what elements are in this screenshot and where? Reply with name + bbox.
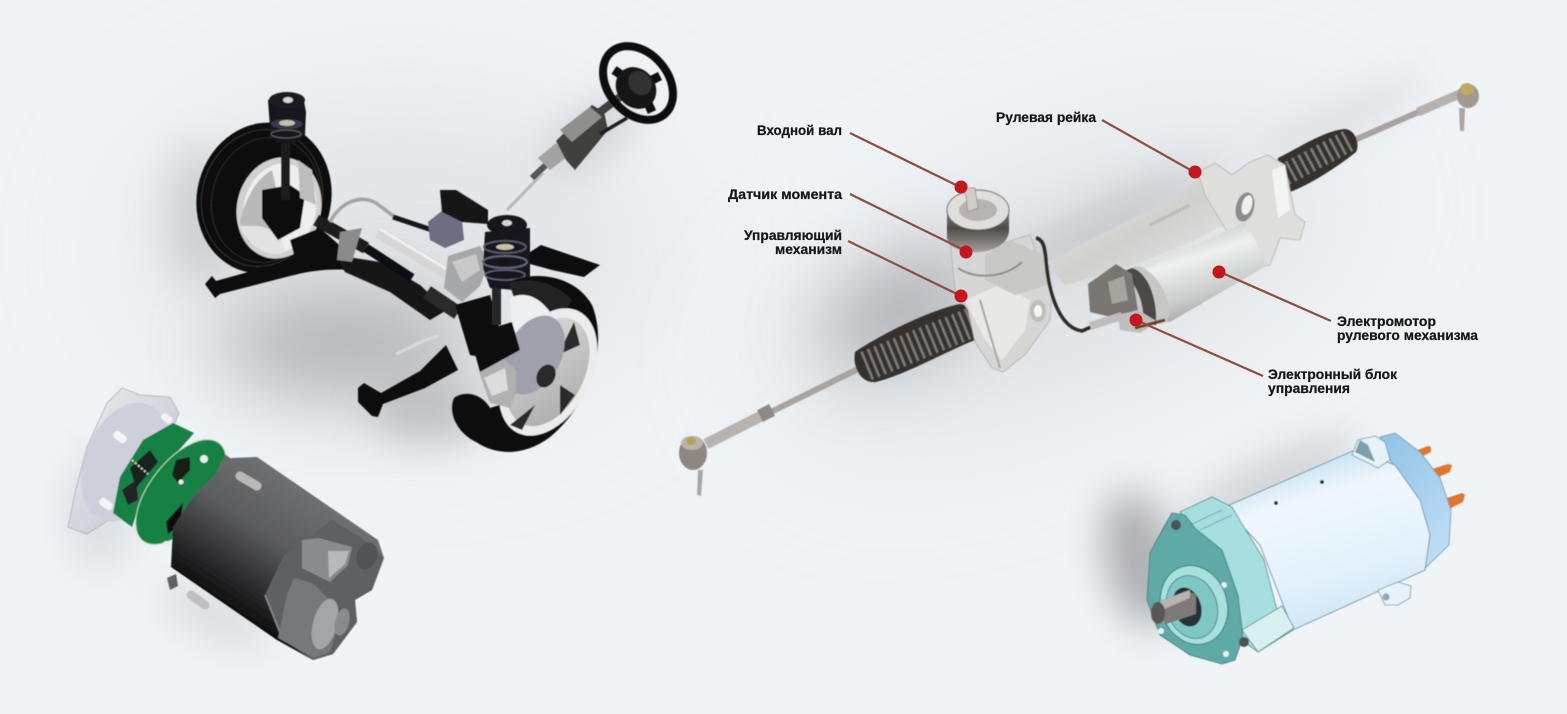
illustration: blue traction motor: [1147, 433, 1465, 664]
label: steering rack: Рулевая рейка: [996, 110, 1096, 125]
label: steering motor: рулевого механизма: [1337, 328, 1479, 343]
teal side band: [1180, 497, 1294, 652]
mudguard bracket: [530, 245, 600, 277]
upper ball joint: [1457, 83, 1479, 131]
label: control mechanism: [744, 228, 842, 257]
label: input shaft: Входной вал: [757, 123, 842, 138]
right housing: [1198, 155, 1305, 270]
lower ball joint: [679, 436, 707, 496]
motor body: [1225, 450, 1430, 630]
label: control mechanism: Управляющий: [744, 228, 842, 243]
illustration: electric power steering rack: [679, 83, 1479, 496]
front bearing and shaft: [1150, 557, 1238, 653]
hydraulic tube: [1036, 238, 1122, 331]
upper bellows: [1278, 129, 1358, 192]
electronic control unit: [1088, 264, 1165, 333]
motor bolts: [167, 476, 257, 605]
left wheel: [180, 107, 348, 289]
lower bellows: [854, 304, 975, 382]
left lower arm: [205, 228, 352, 298]
steering gear housing: [950, 235, 1052, 372]
right wheel: [452, 276, 617, 452]
callout lines and dots: [848, 120, 1331, 376]
lower tie rod: [706, 368, 860, 444]
motor housing: [171, 457, 384, 660]
steering rack assembly: [316, 190, 500, 360]
steering column: [507, 97, 627, 210]
teal front flange: [1147, 513, 1249, 664]
back circuit board: [113, 423, 194, 527]
label: steering motor: [1337, 314, 1479, 343]
front circuit board: [118, 424, 244, 560]
steering wheel: [589, 32, 687, 134]
illustration: steering and front suspension assembly: [180, 32, 687, 452]
brake caliper: [470, 322, 520, 408]
upper tie rod: [1350, 93, 1462, 142]
upper connector: [302, 538, 381, 582]
label: electronic control unit: [1268, 367, 1397, 396]
electric motor: [1118, 222, 1268, 331]
label: steering motor: Электромотор: [1337, 314, 1436, 329]
label: control mechanism: механизм: [775, 242, 842, 257]
rear end cap: [1380, 433, 1451, 570]
left strut: [268, 92, 306, 200]
torque sensor: [947, 190, 1009, 252]
lower connector: [278, 578, 352, 658]
input shaft: [962, 188, 978, 212]
label: electronic control unit: Электронный блок: [1268, 367, 1397, 382]
label: electronic control unit: управления: [1268, 381, 1350, 396]
mounting lugs: [1352, 436, 1411, 605]
rack tube: [1048, 170, 1245, 285]
right lower arm: [358, 336, 458, 417]
terminal pins: [1415, 446, 1465, 509]
motor end plate: [65, 388, 185, 534]
right strut: [483, 215, 530, 325]
label: torque sensor: Датчик момента: [728, 187, 843, 202]
illustration: exploded electric motor: [65, 388, 384, 660]
